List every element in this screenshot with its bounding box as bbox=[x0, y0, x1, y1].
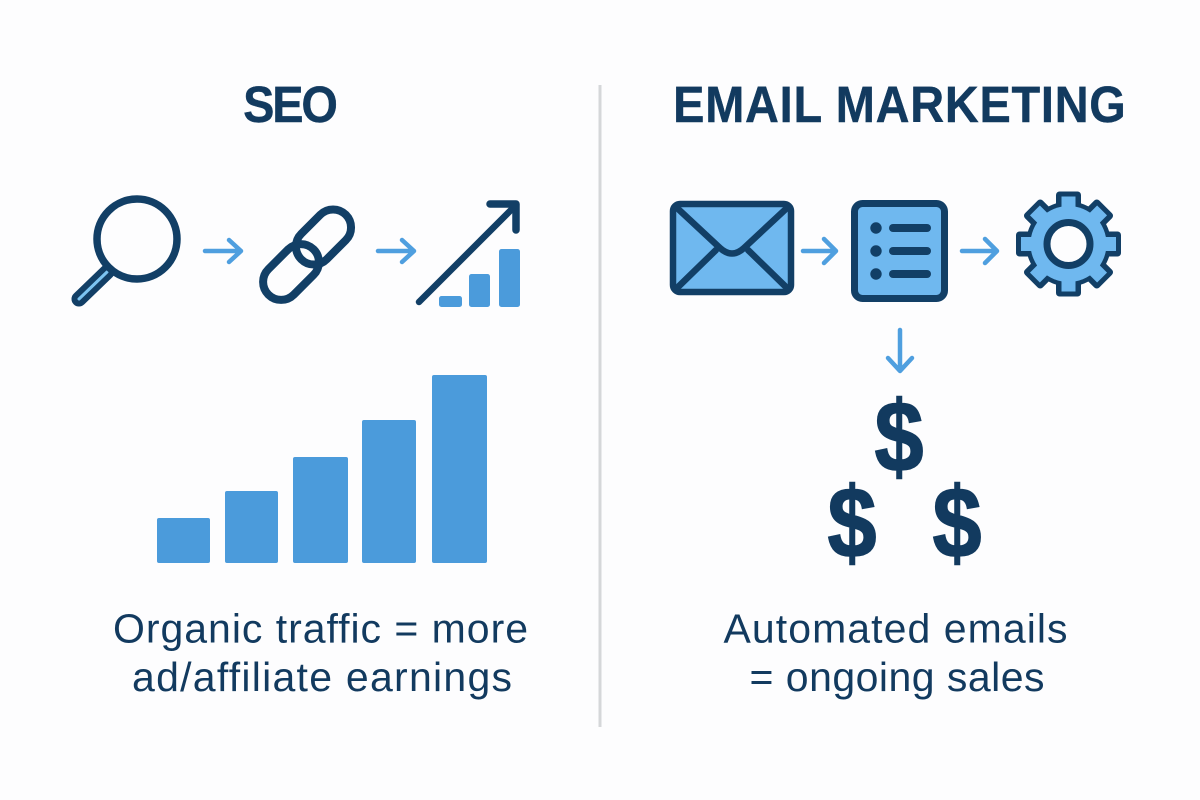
heading: Email Marketing: EMAIL MARKETING bbox=[673, 77, 1126, 133]
arrow: chain to growth bbox=[378, 240, 414, 262]
caption: Email Marketing bbox=[724, 606, 1068, 700]
icon: dollar signs: $ bbox=[932, 467, 982, 578]
icon: list bbox=[854, 204, 944, 298]
icon: dollar signs: $ bbox=[827, 467, 877, 578]
icon: dollar signs bbox=[827, 381, 982, 578]
icon: growth arrow with bars bbox=[419, 204, 520, 307]
arrow: list to sales bbox=[888, 330, 912, 371]
icon: chain links bbox=[256, 202, 359, 307]
panel: SEO bbox=[79, 77, 528, 700]
caption: SEO bbox=[113, 606, 528, 700]
caption: Email Marketing: = ongoing sales bbox=[750, 654, 1044, 700]
arrow: envelope to list bbox=[803, 239, 836, 263]
bar chart: traffic growth bbox=[157, 375, 487, 563]
icon: gear bbox=[1020, 195, 1118, 293]
arrow: list to gear bbox=[962, 239, 997, 263]
caption: SEO: ad/affiliate earnings bbox=[132, 654, 512, 700]
icon: magnifying glass bbox=[79, 199, 177, 299]
icon: dollar signs: $ bbox=[874, 381, 924, 492]
panel: Email Marketing bbox=[673, 77, 1126, 700]
caption: SEO: Organic traffic = more bbox=[113, 606, 528, 652]
heading: SEO: SEO bbox=[243, 77, 338, 133]
caption: Email Marketing: Automated emails bbox=[724, 606, 1068, 652]
icon: envelope bbox=[673, 204, 791, 292]
arrow: magnifier to chain bbox=[205, 240, 241, 262]
